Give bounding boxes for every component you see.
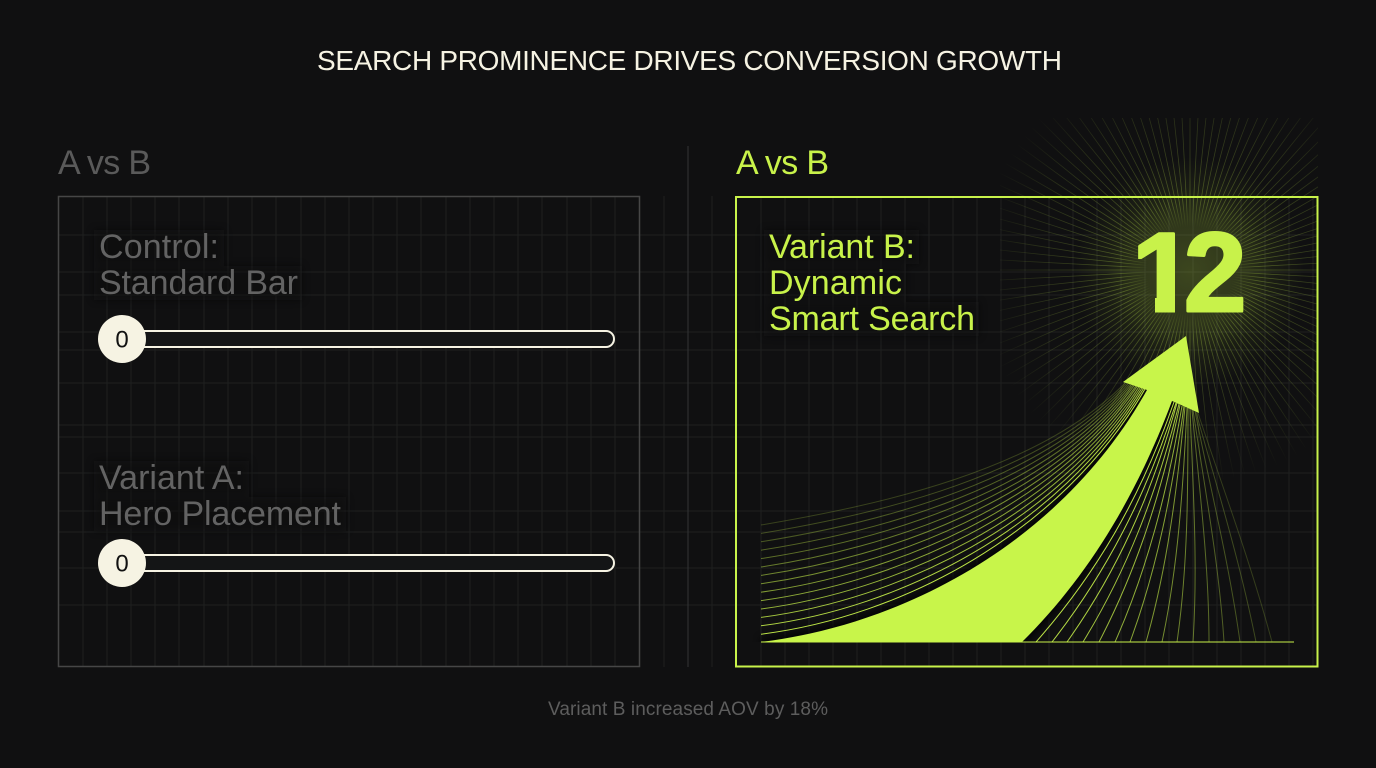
title: SEARCH PROMINENCE DRIVES CONVERSION GROWTH [317,45,1062,76]
variant A label: Variant A: [99,459,244,497]
grid knock-out behind right label [764,230,979,336]
left heading: A vs B [58,144,151,182]
right heading: A vs B [736,144,829,182]
centre divider [687,146,689,667]
variant A slider at 0 [98,539,614,587]
left fan of growth lines [761,383,1145,634]
left panel frame [58,196,640,666]
panel: control and variant A [58,144,640,666]
variant A slider at 0: 0 [115,550,129,578]
right panel frame [736,197,1318,666]
control slider at 0: 0 [115,326,129,354]
right fan of growth lines [1036,402,1272,642]
control label: Standard Bar [99,264,298,302]
chart baseline [761,641,1294,643]
growth arrow [761,336,1199,642]
big number 12: 2 [1184,210,1246,335]
variant A label: Hero Placement [99,495,342,533]
grid knock-out behind left labels [94,230,346,531]
control slider at 0 [98,315,614,363]
starburst behind the number 12 [1000,118,1318,468]
big number 12: 1 [1132,210,1194,335]
variant B label: Variant B: [769,228,915,266]
footnote: Variant B increased AOV by 18% [548,699,828,720]
variant B label: Dynamic [769,264,902,302]
variant B label: Smart Search [769,300,975,338]
background grid [58,196,1318,667]
panel: variant B [736,144,1318,666]
dark shadow around the arrow [761,390,1172,642]
big number 12 [1138,231,1244,312]
control label: Control: [99,228,219,266]
